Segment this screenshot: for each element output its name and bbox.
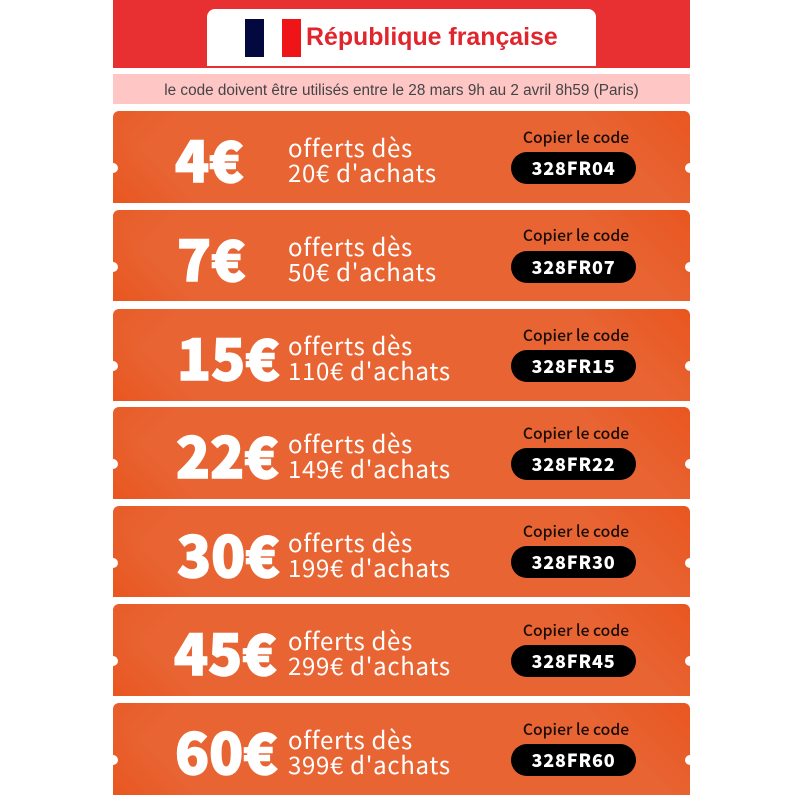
coupon: 15€: Copier le code xyxy=(523,323,629,346)
coupon: 60€: 328FR60 xyxy=(531,747,616,773)
coupon: 15€: 110€ d'achats xyxy=(288,352,451,387)
coupon: 45€: 299€ d'achats xyxy=(288,647,451,682)
coupon: 22€: offerts dès xyxy=(288,425,413,460)
coupon: 45€: Copier le code xyxy=(523,618,629,641)
coupon: 15€: 15€ xyxy=(177,316,279,397)
coupon: 30€: 30€ xyxy=(177,513,279,594)
coupon: 15€: 328FR15 xyxy=(531,353,616,379)
coupon: 7€: 7€ xyxy=(177,217,245,298)
title text: République française xyxy=(306,23,558,51)
coupon: 22€: 328FR22 xyxy=(531,451,616,477)
coupon: 60€ xyxy=(113,703,690,795)
coupon: 7€ xyxy=(113,210,690,301)
coupon: 60€: Copier le code xyxy=(523,717,629,740)
coupon: 30€: 328FR30 xyxy=(531,549,616,575)
coupon: 7€: 50€ d'achats xyxy=(288,253,437,288)
coupon: 22€: 22€ xyxy=(176,414,278,495)
coupon: 30€: offerts dès xyxy=(288,524,413,559)
validity notice xyxy=(113,74,690,104)
validity notice: le code doivent être utilisés entre le 28 mars 9h au 2 avril 8h59 (Paris) xyxy=(164,82,639,99)
coupon: 7€: offerts dès xyxy=(288,228,413,263)
coupon: 4€: 20€ d'achats xyxy=(288,154,437,189)
coupon: 30€: Copier le code xyxy=(523,519,629,542)
coupon: 4€: 328FR04 xyxy=(531,155,616,181)
coupon: 45€: offerts dès xyxy=(288,622,413,657)
coupon: 4€: Copier le code xyxy=(523,125,629,148)
coupon: 15€ xyxy=(113,309,690,401)
title panel xyxy=(207,9,596,66)
coupon: 45€: 328FR45 xyxy=(531,648,616,674)
coupon: 22€ xyxy=(113,407,690,499)
coupon: 60€: 399€ d'achats xyxy=(288,746,451,781)
coupon: 4€ xyxy=(113,111,690,203)
coupon: 7€: 328FR07 xyxy=(531,254,616,280)
coupon: 22€: Copier le code xyxy=(523,421,629,444)
coupon: 22€: 149€ d'achats xyxy=(288,450,451,485)
coupon: 30€: 199€ d'achats xyxy=(288,549,451,584)
coupon: 7€: Copier le code xyxy=(523,223,629,246)
coupon: 45€: 45€ xyxy=(174,611,276,692)
coupon: 4€: 4€ xyxy=(175,118,243,199)
coupon: 30€ xyxy=(113,506,690,597)
coupon: 4€: offerts dès xyxy=(288,129,413,164)
header banner xyxy=(113,0,690,68)
icon: French flag xyxy=(245,19,301,57)
coupon: 60€: 60€ xyxy=(175,710,277,791)
coupon: 60€: offerts dès xyxy=(288,721,413,756)
coupon: 45€ xyxy=(113,604,690,696)
coupon: 15€: offerts dès xyxy=(288,327,413,362)
